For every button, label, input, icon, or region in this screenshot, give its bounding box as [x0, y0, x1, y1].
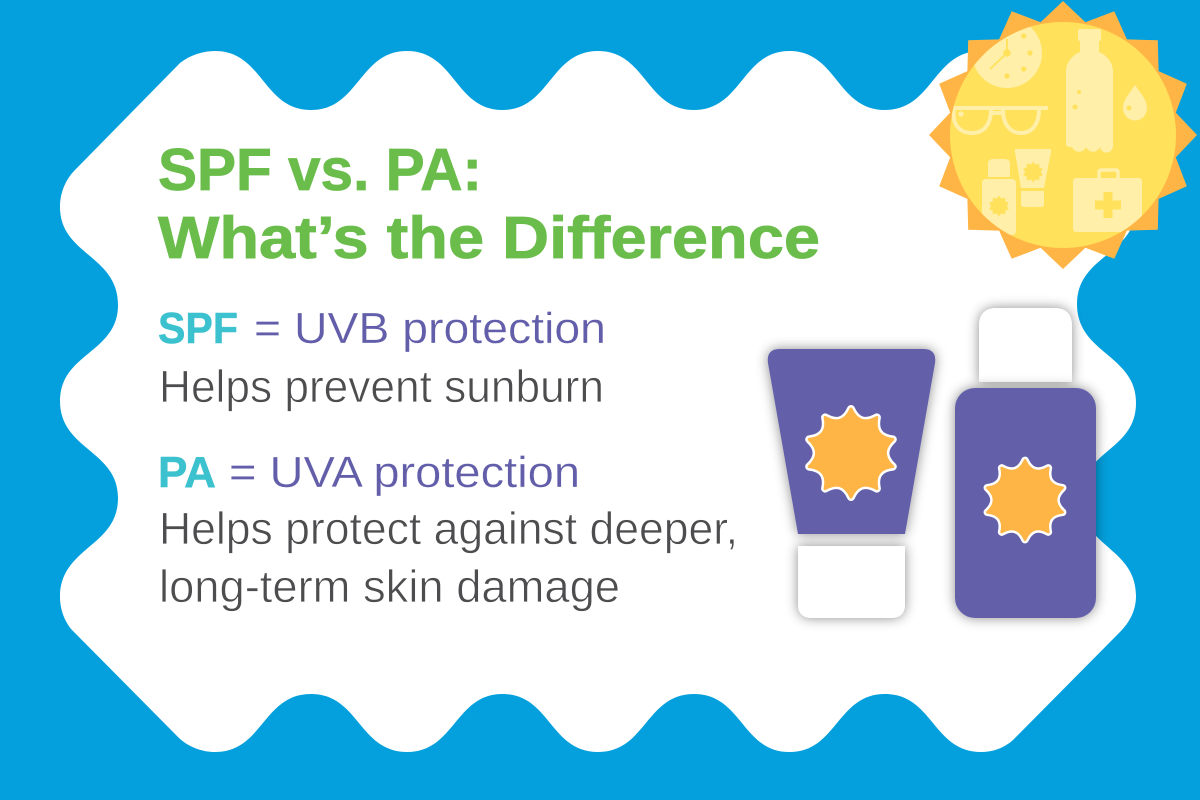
icon: sunscreen tube — [768, 349, 935, 618]
title: SPF vs. PA: — [158, 137, 482, 203]
icon: small bottle — [982, 159, 1016, 235]
text block: PA: long-term skin damage — [159, 561, 620, 612]
title — [158, 137, 820, 271]
icon: sunscreen bottle — [955, 308, 1096, 618]
text block: SPF: = UVB protection — [254, 304, 606, 353]
icon: small tube — [1015, 149, 1051, 207]
icon: first aid kit — [1073, 170, 1142, 232]
icon: water drop — [1123, 85, 1147, 120]
text block: PA: = UVA protection — [229, 448, 580, 497]
text block: SPF: SPF — [158, 304, 238, 353]
title: What’s the Difference — [158, 205, 820, 271]
icon: glasses — [953, 108, 1048, 133]
icon: water bottle — [1066, 29, 1113, 153]
panel: wavy white card — [60, 51, 1136, 752]
text block: SPF: Helps prevent sunburn — [159, 361, 604, 412]
text block: SPF — [158, 304, 606, 412]
text block: PA — [158, 448, 738, 612]
icon: sun badge — [929, 1, 1197, 269]
text block: PA: Helps protect against deeper, — [159, 503, 738, 554]
text block: PA: PA — [158, 448, 216, 497]
icon: clock — [974, 26, 1042, 88]
